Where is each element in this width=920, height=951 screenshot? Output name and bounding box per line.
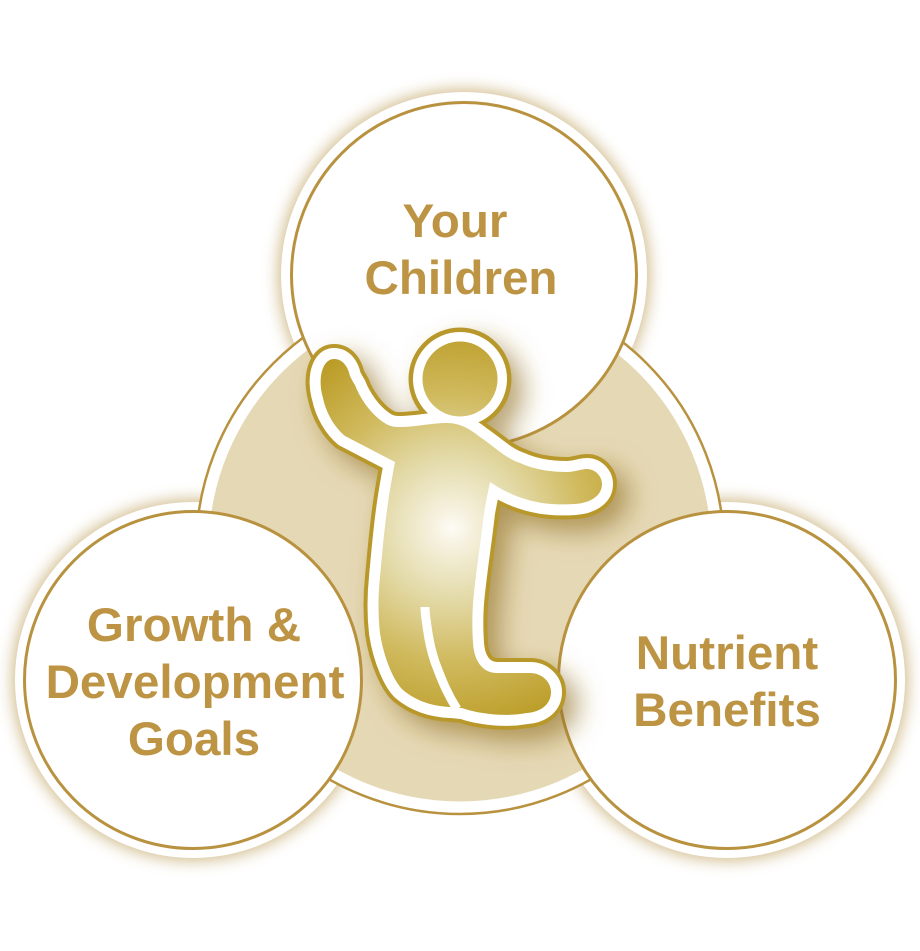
heading: Your Children: Your xyxy=(403,195,507,248)
heading: Growth and Development Goals: Growth & xyxy=(87,599,301,652)
heading: Growth and Development Goals: Goals xyxy=(128,713,260,766)
glow rings behind the circles xyxy=(13,90,907,860)
circle: Your Children xyxy=(292,102,636,448)
heading: Your Children: Children xyxy=(364,252,558,305)
circle: Growth and Development Goals xyxy=(24,512,362,848)
heading: Growth and Development Goals: Development xyxy=(46,656,345,709)
background circle: centre tan disc xyxy=(196,286,724,814)
circle: Nutrient Benefits xyxy=(558,512,896,848)
heading: Nutrient Benefits: Nutrient xyxy=(636,627,818,680)
icon: child figure xyxy=(321,328,602,715)
heading: Nutrient Benefits: Benefits xyxy=(633,684,821,737)
